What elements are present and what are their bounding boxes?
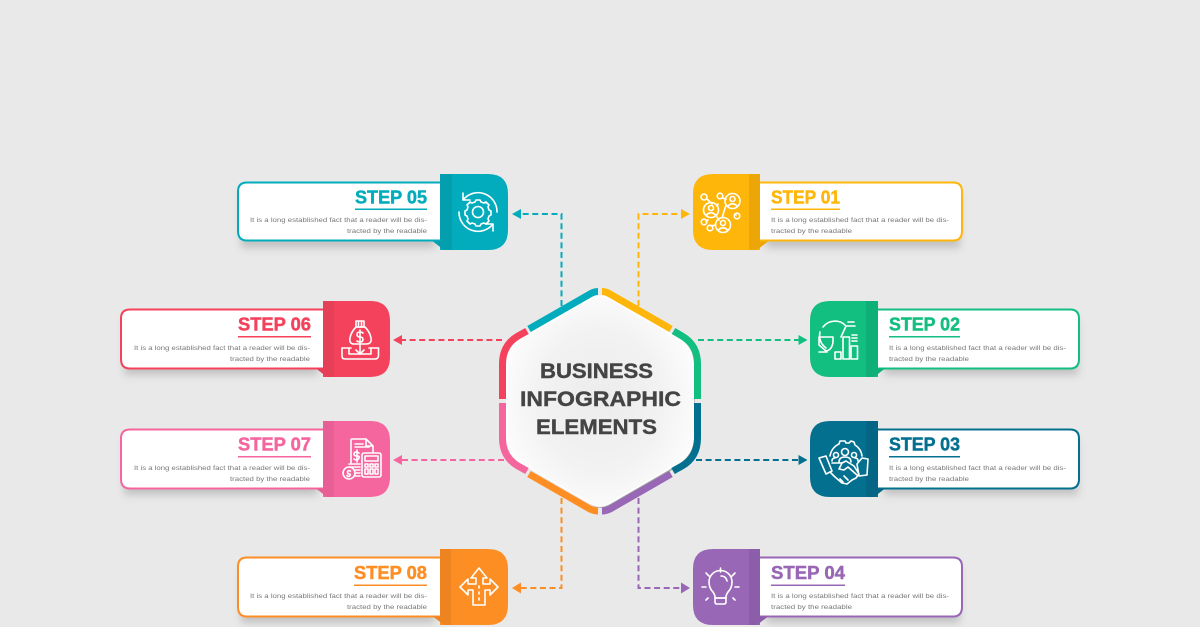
text: step 05: tracted by the readable	[347, 228, 427, 235]
panel: step 06	[121, 301, 390, 377]
central hexagon	[502, 292, 698, 511]
icon: handshake and team gear	[819, 441, 868, 484]
text: step 05	[250, 217, 427, 235]
text: step 02	[889, 345, 1066, 363]
text: step 03: It is a long established fact that a reader will be dis-	[889, 465, 1066, 472]
text: step 01: tracted by the readable	[771, 228, 852, 235]
text: step 08: It is a long established fact that a reader will be dis-	[250, 593, 427, 600]
connector: step 02	[698, 335, 808, 345]
text: step 06: It is a long established fact that a reader will be dis-	[134, 345, 310, 352]
text: step 06: tracted by the readable	[230, 356, 310, 363]
connector: step 08	[512, 498, 562, 594]
text: step 08: tracted by the readable	[347, 604, 427, 611]
text: step 07: It is a long established fact that a reader will be dis-	[134, 465, 310, 472]
heading: step 06: STEP 06	[238, 314, 311, 334]
title	[520, 360, 681, 439]
text: step 07	[134, 465, 310, 483]
text: step 08	[250, 593, 427, 611]
heading: step 08: STEP 08	[354, 562, 427, 583]
panel: step 03	[810, 421, 1079, 497]
icon: gear with circular arrows	[459, 193, 497, 231]
panel: step 05	[238, 174, 508, 250]
heading: step 02: STEP 02	[889, 314, 960, 334]
icon: light bulb	[702, 568, 739, 604]
text: step 03: tracted by the readable	[889, 476, 969, 483]
text: step 04	[771, 593, 949, 611]
heading: step 07: STEP 07	[238, 434, 311, 454]
text: step 01: It is a long established fact that a reader will be dis-	[771, 217, 949, 224]
connector: step 01	[638, 209, 690, 306]
text: step 04: tracted by the readable	[771, 604, 852, 611]
icon: network of people	[701, 193, 740, 232]
icon: three-way arrows	[460, 568, 498, 605]
panel: step 02	[810, 301, 1079, 377]
title: BUSINESS	[540, 360, 653, 383]
text: step 03	[889, 465, 1066, 483]
connector: step 03	[696, 455, 808, 465]
text: step 02: It is a long established fact that a reader will be dis-	[889, 345, 1066, 352]
title: INFOGRAPHIC	[520, 388, 681, 411]
text: step 05: It is a long established fact that a reader will be dis-	[250, 217, 427, 224]
connector: step 05	[512, 209, 562, 306]
panel: step 08	[238, 549, 508, 625]
connector: step 06	[393, 335, 502, 345]
panel: step 01	[693, 174, 962, 250]
text: step 01	[771, 217, 949, 235]
text: step 02: tracted by the readable	[889, 356, 969, 363]
icon: invoice, coins and calculator	[343, 439, 381, 479]
icon: charts and analytics	[819, 321, 858, 359]
heading: step 01: STEP 01	[771, 186, 840, 208]
icon: money bag and tray	[342, 321, 378, 359]
text: step 04: It is a long established fact that a reader will be dis-	[771, 593, 949, 600]
connector: step 07	[393, 455, 504, 465]
panel: step 07	[121, 421, 390, 497]
text: step 07: tracted by the readable	[230, 476, 310, 483]
heading: step 03: STEP 03	[889, 434, 960, 454]
text: step 06	[134, 345, 310, 363]
heading: step 05: STEP 05	[355, 186, 427, 208]
heading: step 04: STEP 04	[771, 562, 846, 583]
panel: step 04	[693, 549, 962, 625]
connector: step 04	[638, 498, 690, 594]
title: ELEMENTS	[536, 416, 657, 439]
